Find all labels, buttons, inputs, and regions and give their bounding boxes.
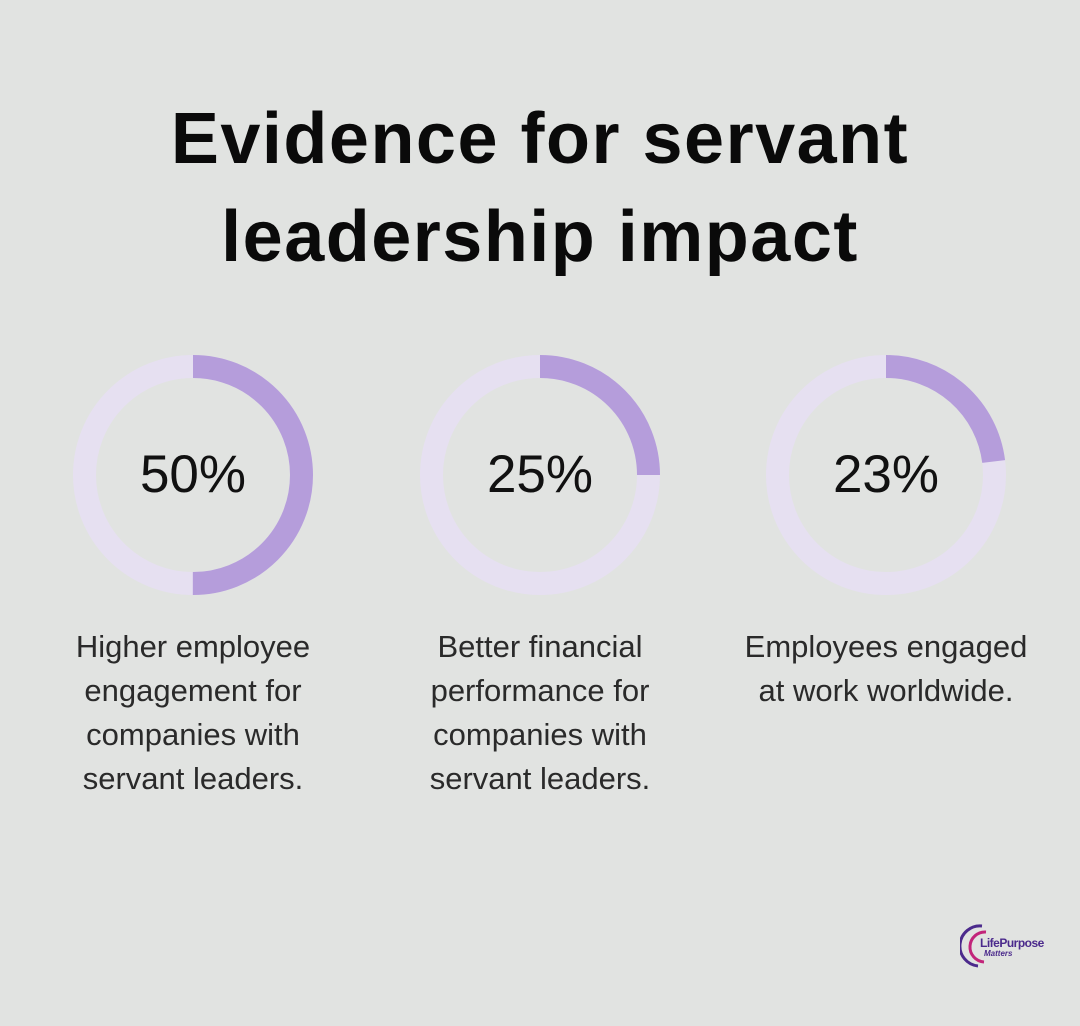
donut: 50%: 50% bbox=[140, 445, 246, 504]
caption: 50%: Higher employee bbox=[76, 629, 310, 664]
caption: 50%: engagement for bbox=[84, 673, 302, 708]
donut: 50% bbox=[73, 355, 313, 595]
title: leadership impact bbox=[221, 197, 859, 277]
donut: 23%: 23% bbox=[833, 445, 939, 504]
caption: 25%: Better financial bbox=[437, 629, 643, 664]
donut: 25%: 25% bbox=[487, 445, 593, 504]
logo: LifePurpose bbox=[980, 936, 1044, 950]
caption: 50%: companies with bbox=[86, 717, 300, 752]
title bbox=[171, 99, 909, 277]
caption: 50% bbox=[76, 629, 310, 796]
donut: 25% bbox=[420, 355, 660, 595]
donut: 23% bbox=[766, 355, 1006, 595]
caption: 23%: Employees engaged bbox=[745, 629, 1027, 664]
logo: Matters bbox=[984, 949, 1012, 958]
title: Evidence for servant bbox=[171, 99, 909, 179]
caption: 23% bbox=[745, 629, 1027, 708]
caption: 23%: at work worldwide. bbox=[758, 673, 1013, 708]
caption: 25% bbox=[430, 629, 650, 796]
caption: 25%: companies with bbox=[433, 717, 647, 752]
caption: 25%: servant leaders. bbox=[430, 761, 650, 796]
caption: 25%: performance for bbox=[431, 673, 649, 708]
logo bbox=[960, 924, 1044, 968]
caption: 50%: servant leaders. bbox=[83, 761, 303, 796]
